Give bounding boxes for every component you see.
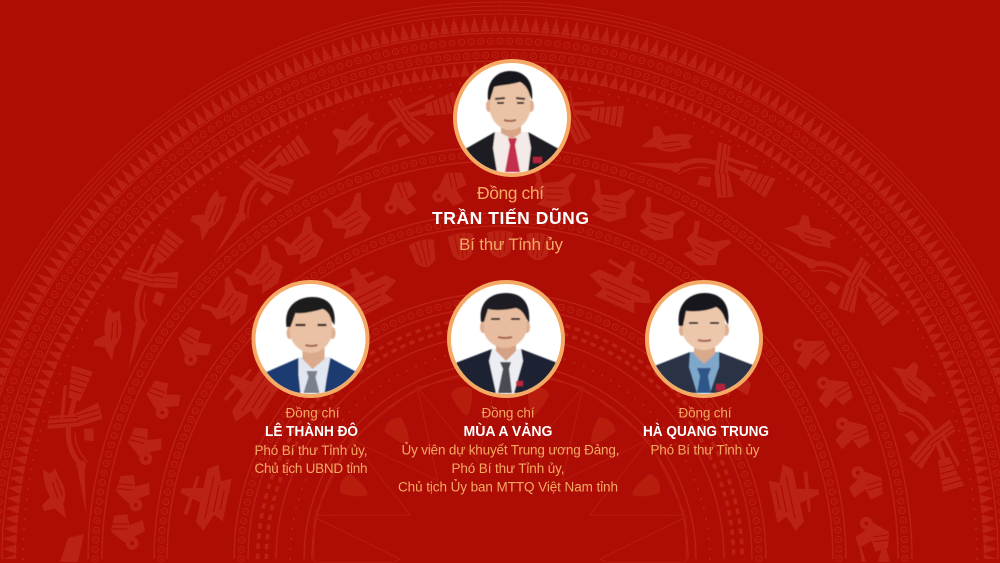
name text: MÙA A VẢNG	[464, 422, 552, 440]
portrait	[450, 61, 574, 175]
inner scenes band	[174, 230, 826, 534]
person: Mùa A Vảng	[398, 282, 620, 494]
name text	[254, 406, 368, 476]
person: Trần Tiến Dũng	[432, 61, 589, 254]
name text	[432, 183, 589, 254]
bottom heron fragments	[60, 530, 890, 562]
small birds	[37, 112, 937, 518]
name text: Bí thư Tỉnh ủy	[459, 235, 564, 254]
name text: Đồng chí	[286, 406, 340, 420]
name text: Phó Bí thư Tỉnh ủy	[650, 442, 760, 458]
portrait	[248, 282, 372, 396]
meander band	[262, 321, 738, 559]
person: Lê Thành Đô	[248, 282, 372, 476]
name text: Phó Bí thư Tỉnh ủy,	[254, 443, 368, 458]
person: Hà Quang Trung	[642, 282, 769, 458]
name text: HÀ QUANG TRUNG	[643, 423, 769, 440]
name text: Chủ tịch Ủy ban MTTQ Việt Nam tỉnh	[398, 480, 618, 494]
deer and ducks band	[110, 167, 890, 553]
name text: Đồng chí	[678, 406, 732, 420]
name text: LÊ THÀNH ĐÔ	[265, 422, 358, 440]
portrait	[444, 282, 568, 396]
name text: Đồng chí	[482, 406, 535, 420]
herons	[25, 80, 971, 514]
name text	[398, 406, 620, 494]
name text: Đồng chí	[477, 183, 544, 203]
name text: Ủy viên dự khuyết Trung ương Đảng,	[402, 442, 620, 458]
name text: Chủ tịch UBND tỉnh	[254, 461, 368, 476]
central star rays	[314, 368, 686, 562]
name text: Phó Bí thư Tỉnh ủy,	[452, 461, 564, 476]
name text: TRẦN TIẾN DŨNG	[432, 207, 589, 228]
portrait	[642, 282, 766, 396]
name text	[643, 406, 769, 458]
dots inner	[290, 349, 710, 559]
